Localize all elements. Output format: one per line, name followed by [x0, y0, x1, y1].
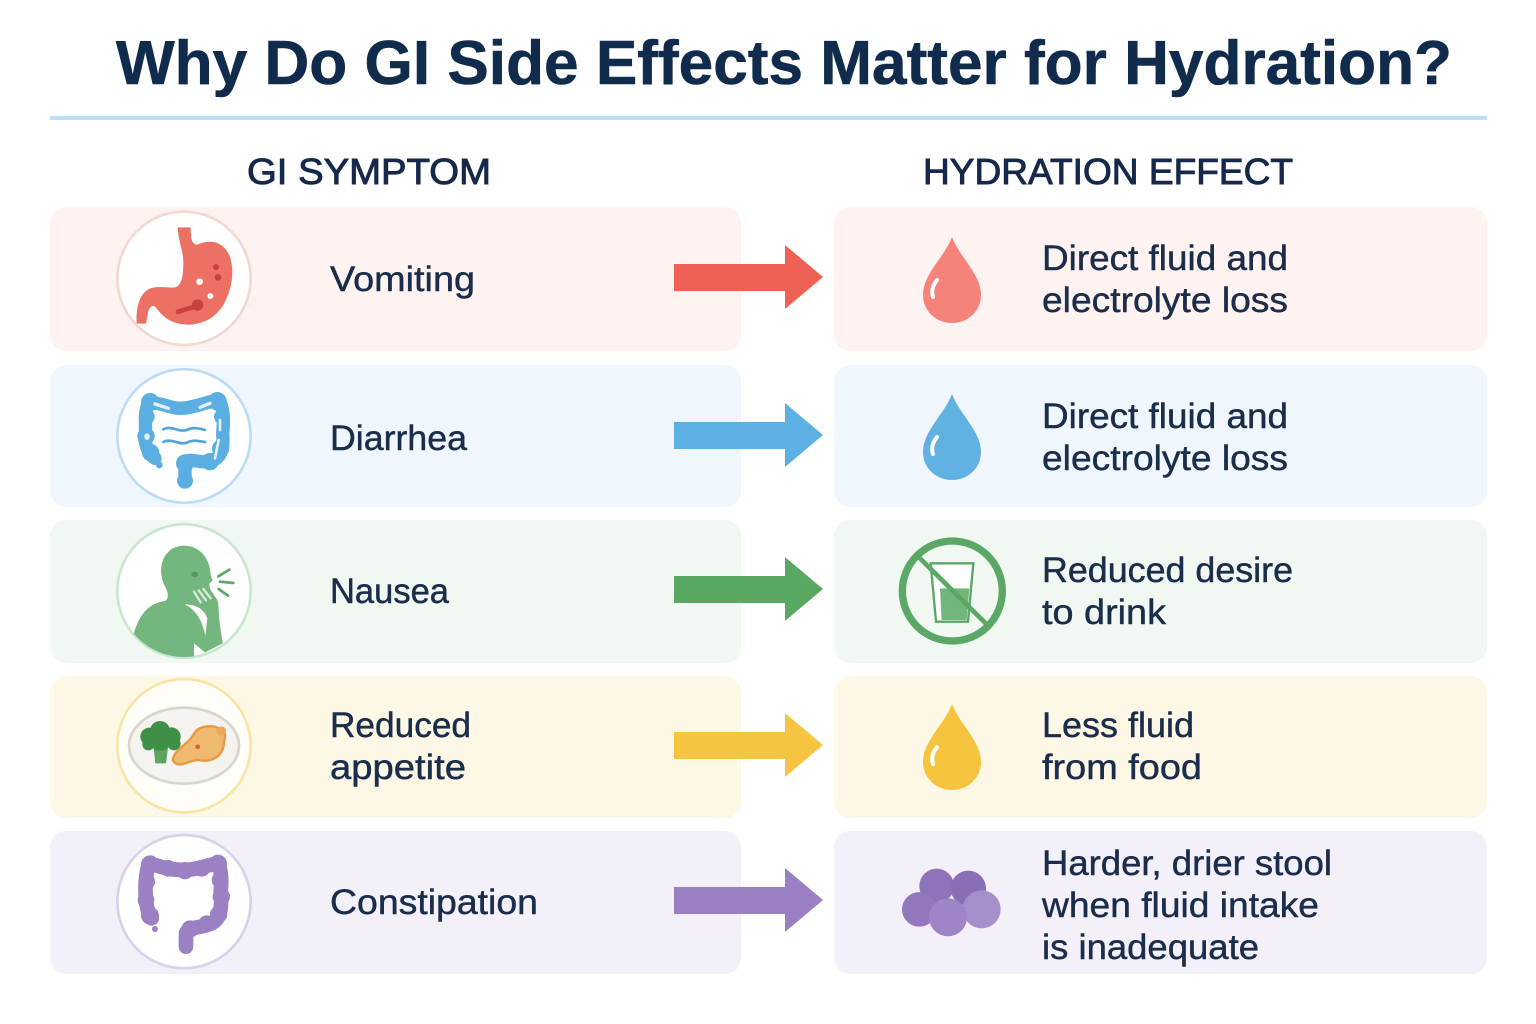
- row: diarrhea: [50, 365, 1487, 507]
- text: reduced desire to drink: to drink: [1042, 593, 1167, 632]
- row: nausea: [50, 520, 1487, 663]
- icon: red drop: [923, 237, 981, 323]
- panel: nausea effect: [834, 520, 1487, 663]
- text: fluid and electrolyte loss: electrolyte loss: [1042, 439, 1288, 478]
- row: constipation: [50, 831, 1487, 974]
- label: constipation: Constipation: [330, 883, 538, 922]
- panel: nausea symptom: [50, 520, 741, 663]
- icon: intestines with water: [117, 369, 251, 503]
- row: reduced appetite: [50, 676, 1487, 818]
- label: diarrhea: Diarrhea: [330, 419, 468, 458]
- text: harder drier stool: Harder, drier stool: [1042, 844, 1332, 883]
- icon: stomach: [117, 212, 251, 345]
- icon: blue drop: [923, 394, 981, 480]
- panel: diarrhea symptom: [50, 365, 741, 507]
- arrow: vomiting to fluid loss: [674, 245, 823, 309]
- text: less fluid from food: Less fluid: [1042, 706, 1194, 745]
- panel: appetite effect: [834, 676, 1487, 818]
- title: Why Do GI Side Effects Matter for Hydration?: [116, 29, 1452, 98]
- panel: constipation effect: [834, 831, 1487, 974]
- text: fluid and electrolyte loss: electrolyte loss: [1042, 281, 1288, 320]
- icon: colon: [117, 835, 251, 968]
- text: harder drier stool: is inadequate: [1042, 928, 1259, 967]
- row: vomiting: [50, 207, 1487, 351]
- panel: vomiting symptom: [50, 207, 741, 351]
- icon: yellow drop: [923, 704, 981, 790]
- text: less fluid from food: from food: [1042, 748, 1202, 787]
- arrow: nausea to reduced desire: [674, 557, 823, 621]
- arrow: constipation to harder stool: [674, 868, 823, 932]
- arrow: diarrhea to fluid loss: [674, 403, 823, 467]
- icon: person feeling nauseous: [117, 524, 251, 662]
- panel: vomiting effect: [834, 207, 1487, 351]
- icon: stool pellets: [902, 869, 1001, 936]
- column heading: GI symptom: GI SYMPTOM: [247, 151, 491, 192]
- label: vomiting: Vomiting: [330, 260, 475, 299]
- panel: appetite symptom: [50, 676, 741, 818]
- text: harder drier stool: when fluid intake: [1041, 886, 1319, 925]
- text: reduced desire to drink: Reduced desire: [1042, 551, 1293, 590]
- icon: plate of food: [117, 679, 251, 812]
- label: nausea: Nausea: [330, 572, 450, 611]
- label: reduced appetite: appetite: [330, 748, 466, 787]
- icon: crossed-out glass: [902, 541, 1002, 641]
- column heading: hydration effect: HYDRATION EFFECT: [923, 151, 1293, 192]
- text: fluid and electrolyte loss: Direct fluid and: [1042, 239, 1288, 278]
- panel: constipation symptom: [50, 831, 741, 974]
- text: fluid and electrolyte loss: Direct fluid and: [1042, 397, 1288, 436]
- panel: diarrhea effect: [834, 365, 1487, 507]
- label: reduced appetite: Reduced: [330, 706, 471, 745]
- arrow: appetite to less fluid: [674, 713, 823, 777]
